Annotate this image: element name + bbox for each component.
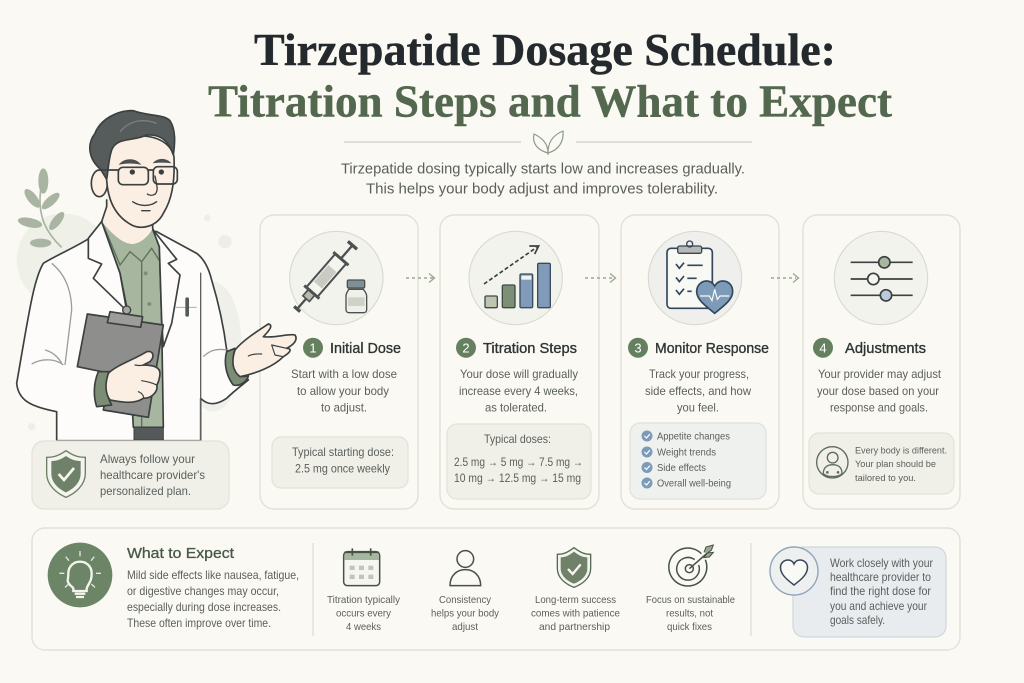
badge 2 [456,338,476,358]
description [645,367,751,414]
heading: Initial Dose [330,340,401,357]
arrow [406,274,434,282]
description: Your dose will gradually [460,367,578,381]
callout: work closely with your provider: healthcare provider to [830,570,931,584]
description: response and goals. [830,400,928,414]
icon: shield [47,451,85,497]
badge 4: 4 [819,340,827,355]
tip: long-term success: and partnership [539,621,610,633]
tip: sustainable results: quick fixes [667,621,712,633]
callout: work closely with your provider [770,547,946,637]
clipboard [77,314,163,417]
lapels [88,222,127,311]
heading: Adjustments [845,340,926,357]
description [291,367,397,414]
tip: titration timing [327,548,401,633]
description: Track your progress, [649,367,749,381]
badge 4 [813,338,833,358]
shirt [102,222,163,427]
description: your dose based on your [817,384,939,398]
callout: starting dose: 2.5 mg once weekly [295,462,390,476]
callout: typical doses: 10 mg → 12.5 mg → 15 mg [454,471,581,485]
lab coat [17,222,248,441]
callout: starting dose: Typical starting dose: [292,445,394,459]
description [817,367,942,414]
icon: syringe and vial [290,231,383,325]
panel: step 4 adjustments [803,215,960,509]
head and neck [103,190,153,244]
tip: consistency [431,551,500,633]
description: Mild side effects like nausea, fatigue, [127,568,299,582]
description: increase every 4 weeks, [459,384,578,398]
illustration: doctor [17,111,296,441]
icon: target [669,545,713,586]
panel: step 3 monitor response [621,215,779,509]
callout: every body is different: Every body is different. [855,445,947,456]
icon: person in circle [817,447,848,478]
icon: leaf divider [344,131,752,155]
tip: long-term success: Long-term success [535,594,616,606]
title: Titration Steps and What to Expect [208,76,892,126]
callout: typical doses [447,424,591,499]
badge 1 [303,338,323,358]
arrow [585,274,616,282]
right hand and cuff [225,348,248,385]
left hand and cuff [94,372,112,407]
description: Your provider may adjust [818,367,942,381]
callout: starting dose [272,437,408,488]
description: especially during dose increases. [127,600,281,614]
checklist: Weight trends [657,446,716,458]
panel: what to expect [32,528,960,650]
callout: work closely with your provider: goals safely. [830,613,885,627]
icon: shield check [557,548,591,587]
description: you feel. [677,400,719,414]
description: Start with a low dose [291,367,397,381]
hair [90,111,175,179]
badge 3 [628,338,648,358]
badge 1: 1 [309,340,317,355]
tip: sustainable results: Focus on sustainable [646,594,735,606]
checklist: Appetite changes [657,430,730,442]
glasses and face [120,159,170,164]
tip: long-term success [531,548,620,633]
description: or digestive changes may occur, [127,584,279,598]
badge 2: 2 [462,340,470,355]
description: These often improve over time. [127,616,271,630]
heading: Monitor Response [655,340,769,357]
icon: light bulb [48,543,112,607]
tip: titration timing: Titration typically [327,594,401,606]
description [459,367,578,414]
tip: consistency: adjust [452,621,478,633]
description: to adjust. [321,400,367,414]
checklist: Overall well-being [657,478,731,490]
callout: follow your provider: personalized plan. [100,484,191,498]
callout: follow your provider [32,441,229,509]
tip: consistency: Consistency [439,594,492,606]
callout: work closely with your provider: you and achieve your [830,599,927,613]
description: as tolerated. [485,400,547,414]
panel: step 2 titration steps [440,215,599,509]
badge 3: 3 [634,340,642,355]
description: to allow your body [297,384,389,398]
callout: work closely with your provider: find the right dose for [830,584,931,598]
icon: plant [17,168,67,247]
callout: every body is different: Your plan should be [855,459,936,470]
checklist [630,423,766,499]
callout: work closely with your provider: Work closely with your [830,556,933,570]
icon: heart [780,560,808,585]
tip: titration timing: occurs every [336,608,392,620]
subtitle: This helps your body adjust and improves tolerability. [366,180,718,197]
icon: clipboard and heart [648,231,742,325]
icon: rising bars [469,231,562,325]
tip: sustainable results [646,545,735,633]
icon: calendar [344,548,380,586]
title: Tirzepatide Dosage Schedule: [254,25,836,75]
title [208,25,892,126]
checklist: Side effects [657,462,706,474]
heading: What to Expect [127,546,234,562]
heading: Titration Steps [483,340,577,357]
subtitle: Tirzepatide dosing typically starts low and increases gradually. [341,160,745,177]
callout: every body is different: tailored to you. [855,473,916,484]
subtitle [341,160,745,197]
description: side effects, and how [645,384,751,398]
tip: long-term success: comes with patience [531,608,620,620]
icon: person [450,551,481,586]
tip: consistency: helps your body [431,608,500,620]
callout: every body is different [809,433,954,494]
tip: sustainable results: results, not [666,608,713,620]
arrow [771,274,798,282]
callout: typical doses: Typical doses: [484,432,551,446]
panel: step 1 initial dose [260,215,418,509]
callout: follow your provider: healthcare provider's [100,468,205,482]
callout: follow your provider: Always follow your [100,452,195,466]
callout: typical doses: 2.5 mg → 5 mg → 7.5 mg → [454,455,583,469]
description [127,568,299,630]
icon: sliders [834,231,928,325]
tip: titration timing: 4 weeks [346,621,381,633]
